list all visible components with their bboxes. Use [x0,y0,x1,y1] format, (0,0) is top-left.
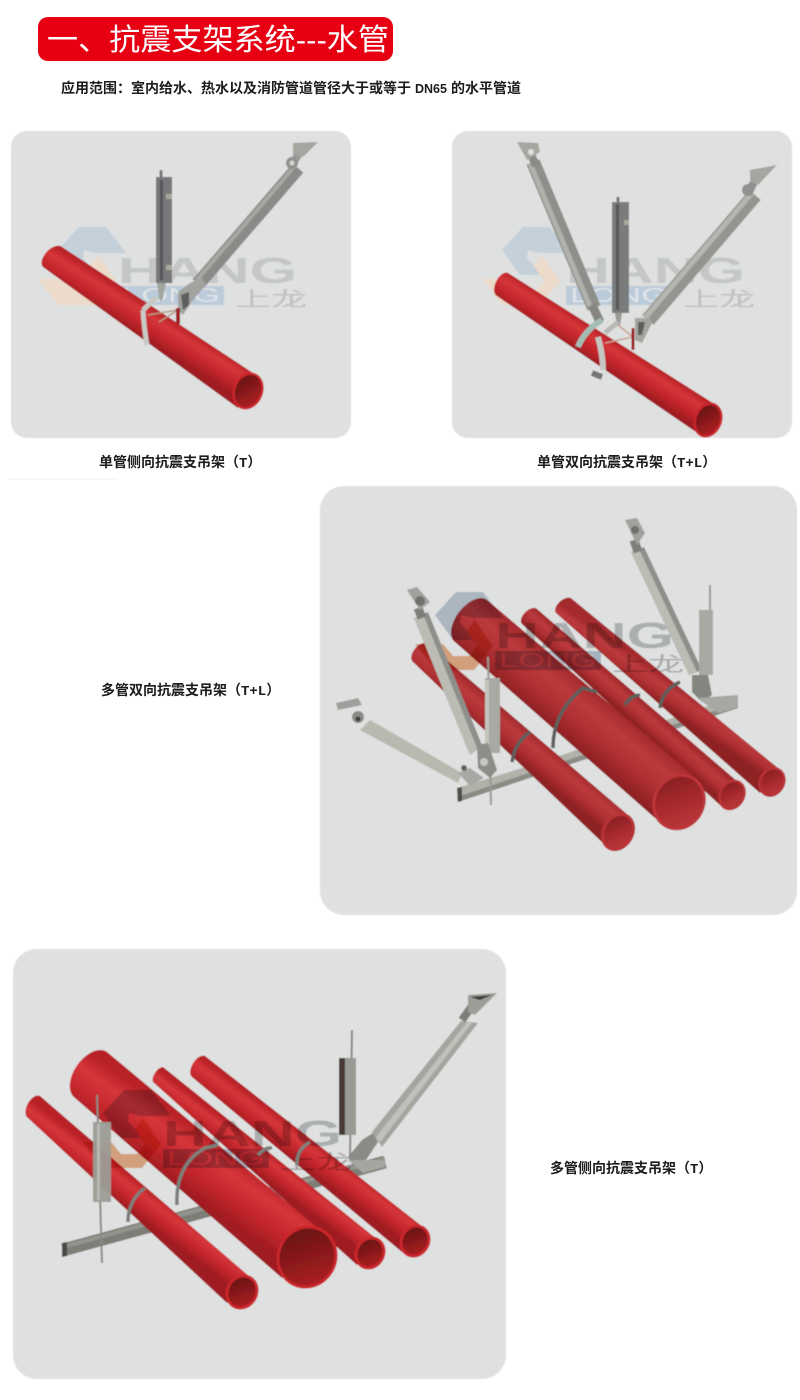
red pipe [494,273,728,442]
application scope text: 的水平管道 [451,80,521,98]
watermark logo: HANG [566,250,745,291]
right brace [625,518,702,675]
diagonal brace [372,993,497,1147]
watermark logo: LONG [122,285,220,307]
caption: multi pipe lateral: 多管侧向抗震支吊架（T） [550,1160,712,1178]
title banner [38,17,393,61]
watermark logo: 上龙 [235,288,307,311]
channel rail [62,1159,385,1257]
panel: single pipe bidirectional bracket [452,131,792,442]
watermark logo: HANG [118,250,297,291]
caption: single pipe bidirectional: 单管双向抗震支吊架（T+L） [537,454,716,472]
panel: single pipe lateral bracket [11,131,351,438]
watermark logo: HANG [163,1113,342,1154]
watermark logo: 上龙 [612,653,684,676]
red pipes [411,598,791,857]
left brace [517,142,600,322]
watermark logo [38,227,307,311]
diagonal brace [178,142,318,315]
left brace [407,587,482,755]
watermark logo: LONG [167,1148,265,1170]
watermark logo: LONG [499,650,597,672]
watermark logo: HANG [495,615,674,656]
pipe clamps [512,682,680,762]
channel rail [457,696,738,802]
watermark logo [415,592,684,676]
long left brace [336,698,462,783]
caption: multi pipe bidirectional: 多管双向抗震支吊架（T+L） [101,682,280,700]
panel: multi pipe lateral bracket [13,949,506,1379]
red pipe [42,246,269,414]
left hanger channel and joint cluster [458,657,500,805]
pipe clamps [128,1142,310,1222]
title banner: 一、抗震支架系统---水管 [47,24,389,57]
watermark logo: 上龙 [280,1151,352,1174]
right hanger channel [339,1030,385,1173]
vertical hanger channel [156,170,172,302]
panel: multi pipe bidirectional bracket [320,486,797,915]
application scope text: DN65 [415,82,447,96]
red pipes [25,1050,436,1316]
pipe clamp [143,297,178,345]
caption: single pipe lateral: 单管侧向抗震支吊架（T） [99,454,261,472]
vertical hanger channel [612,197,629,326]
application scope text: 应用范围：室内给水、热水以及消防管道管径大于或等于 [61,82,411,98]
right brace [635,165,777,343]
watermark logo [482,227,755,311]
right hanger channel [692,585,738,713]
watermark logo [83,1090,352,1174]
watermark logo: 上龙 [683,288,755,311]
pipe clamps [578,320,633,377]
watermark logo: LONG [570,285,668,307]
left hanger channel [93,1095,111,1263]
